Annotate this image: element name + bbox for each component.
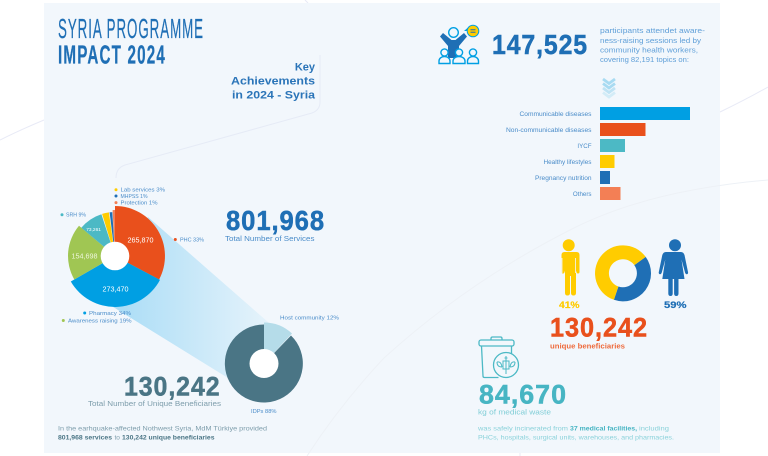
summary text: 801,968 services xyxy=(58,435,112,442)
icon: medical waste bin xyxy=(479,337,518,378)
pie legend: SRH 9% xyxy=(66,213,86,219)
pie chart: services: 154,698 xyxy=(72,252,97,260)
summary text: 130,242 unique beneficiaries xyxy=(122,435,215,442)
donut chart: host community and IDPs: Host community 12% xyxy=(280,316,339,322)
summary text xyxy=(58,426,267,442)
bar chart: topics: Healthy lifestyles xyxy=(544,159,592,166)
pie legend: Protection 1% xyxy=(120,201,158,207)
gender percentages: 41% xyxy=(559,300,580,311)
title xyxy=(58,13,204,70)
gender percentages: 59% xyxy=(664,300,687,311)
participants description: covering 82,191 topics on: xyxy=(600,55,689,64)
heading: key achievements: Achievements xyxy=(231,76,315,88)
pie legend: MHPSS 1% xyxy=(120,194,148,200)
pie legend: Awareness raising 19% xyxy=(68,318,132,324)
heading: key achievements: in 2024 - Syria xyxy=(232,90,316,102)
text: SYRIA PROGRAMME xyxy=(58,13,204,44)
stat: unique beneficiaries orange: unique beneficiaries xyxy=(550,344,625,351)
pie legend: PHC 33% xyxy=(180,238,204,244)
participants description: participants attendet aware- xyxy=(600,26,706,35)
bar chart: topics: Others xyxy=(573,191,592,198)
pie legend: Lab services 3% xyxy=(120,188,165,194)
stat: participants: 147,525 xyxy=(492,29,588,60)
pie legend xyxy=(60,188,204,324)
zoom cone connecting pie to donut xyxy=(110,217,268,378)
stat: unique beneficiaries orange: 130,242 xyxy=(550,312,648,342)
donut chart: gender split xyxy=(595,245,651,301)
bar chart: topics: Communicable diseases xyxy=(520,111,592,118)
donut chart: host community and IDPs xyxy=(225,316,339,415)
medical waste description: including xyxy=(639,426,669,433)
bar chart: topics: Non-communicable diseases xyxy=(506,127,592,134)
stat: medical waste: kg of medical waste xyxy=(478,408,551,417)
bar chart: topics: IYCF xyxy=(577,143,592,150)
medical waste description: was safely incinerated from xyxy=(477,426,568,433)
title: IMPACT 2024 xyxy=(58,40,166,70)
medical waste description xyxy=(477,426,674,442)
stat: medical waste: 84,670 xyxy=(479,380,567,410)
stat: unique beneficiaries: 130,242 xyxy=(124,372,220,402)
icon: health worker with group xyxy=(439,25,479,64)
stat: total services: Total Number of Services xyxy=(225,234,315,243)
donut chart: host community and IDPs: IDPs 88% xyxy=(251,409,276,415)
bar chart: topics: Pregnancy nutrition xyxy=(535,175,592,182)
icon: man xyxy=(561,239,580,296)
pie chart: services: 273,470 xyxy=(103,284,128,294)
summary text: to xyxy=(114,435,120,442)
pie chart: services: 73,261 xyxy=(86,227,101,233)
summary text: In the earhquake-affected Nothwest Syria, MdM Türkiye provided xyxy=(58,426,267,433)
pie chart: services xyxy=(68,206,165,307)
participants description xyxy=(600,26,706,64)
bar chart: topics xyxy=(506,107,690,200)
pie chart: services: 265,870 xyxy=(128,236,153,244)
stat: unique beneficiaries: Total Number of Unique Beneficiaries xyxy=(88,399,221,408)
medical waste description: 37 medical facilities, xyxy=(570,426,637,433)
gender percentages xyxy=(559,300,687,311)
icon: down chevrons xyxy=(603,79,615,97)
participants description: community health workers, xyxy=(600,46,698,54)
stat: unique beneficiaries xyxy=(88,372,221,408)
heading: key achievements: Key xyxy=(295,62,316,74)
icon: woman xyxy=(659,239,688,296)
heading: key achievements xyxy=(231,62,316,102)
participants description: ness-raising sessions led by xyxy=(600,36,701,45)
pie legend: Pharmacy 34% xyxy=(89,311,131,317)
stat: total services: 801,968 xyxy=(226,205,325,236)
medical waste description: PHCs, hospitals, surgical units, warehouses, and pharmacies. xyxy=(478,435,674,442)
